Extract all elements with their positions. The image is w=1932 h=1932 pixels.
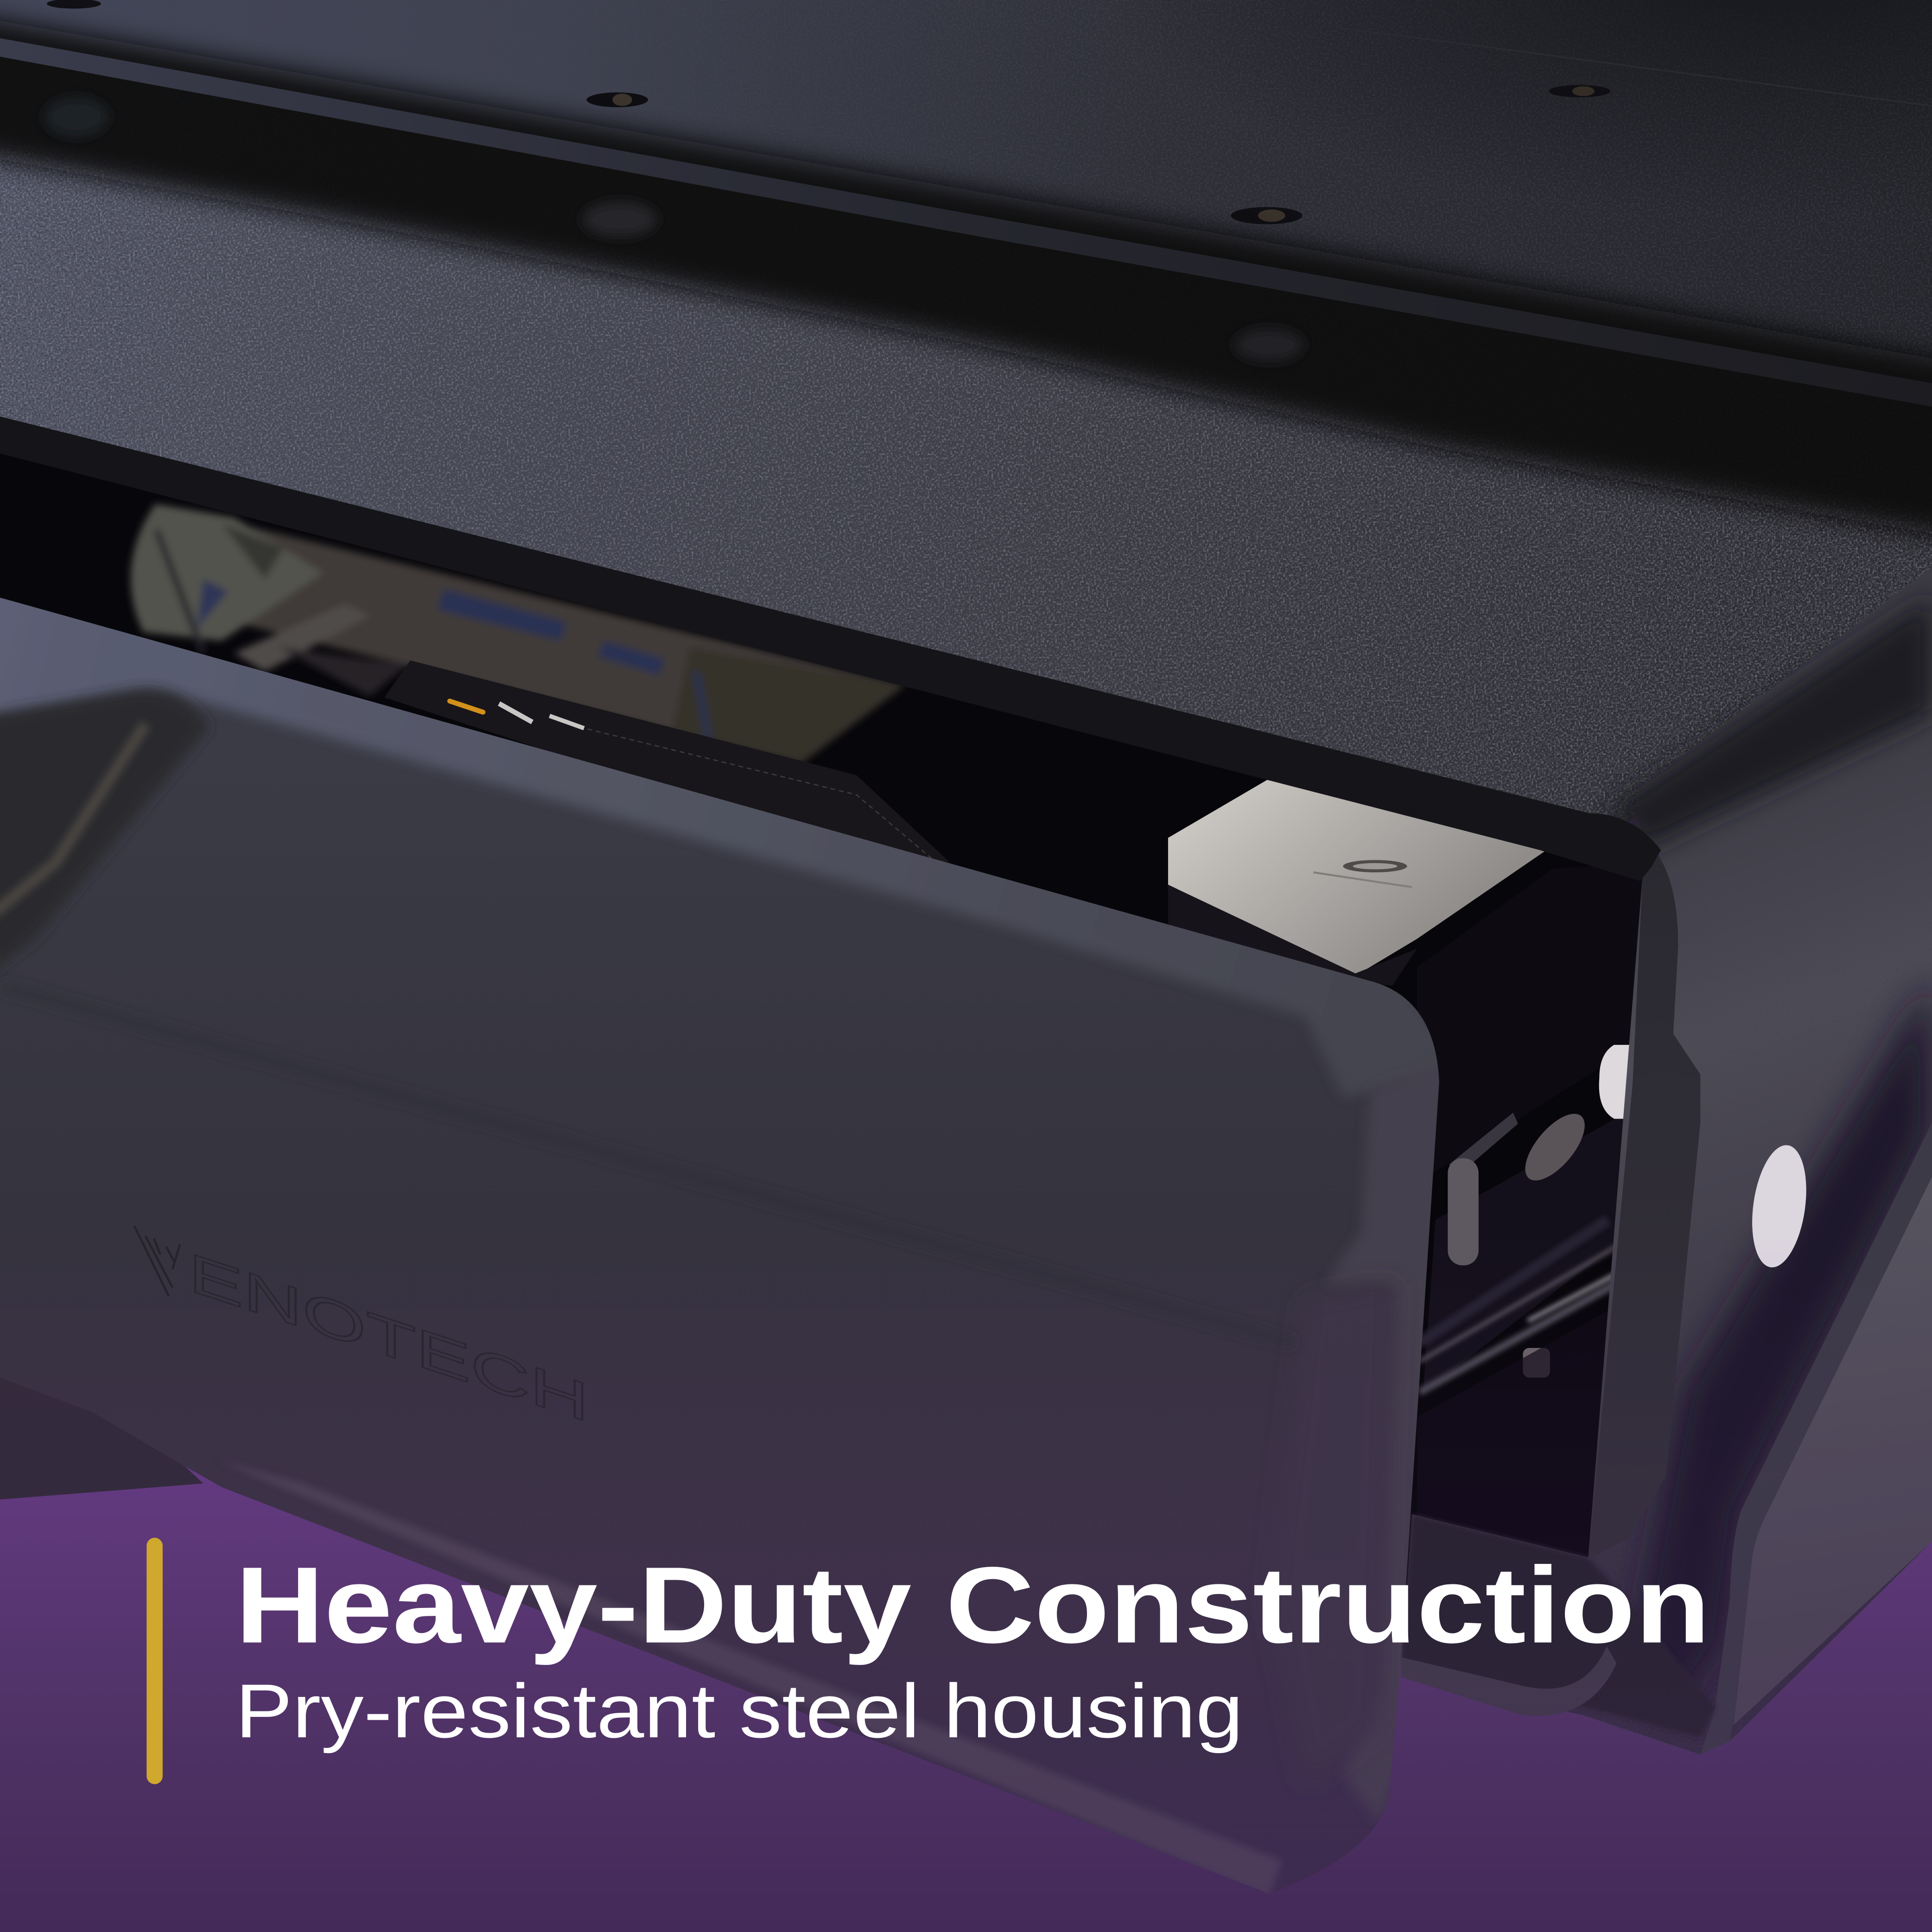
rail bracket bbox=[1417, 863, 1651, 1183]
slide rail mechanism bbox=[1417, 863, 1651, 1602]
top right dark corner shading bbox=[986, 0, 1932, 247]
embossed brand logo bbox=[134, 1226, 589, 1434]
bottom purple tint bbox=[0, 1232, 1932, 1932]
top plate mounting holes bbox=[47, 0, 1610, 224]
small pin bbox=[1523, 1348, 1550, 1378]
lower plate light speckle bbox=[0, 49, 1932, 838]
box markings bbox=[1343, 860, 1407, 872]
logo mark bbox=[134, 1226, 180, 1296]
cash bundle inside drawer bbox=[131, 504, 906, 764]
white box inside drawer bbox=[1168, 779, 1546, 986]
slot right bbox=[1515, 1104, 1595, 1190]
steel door frame bbox=[1588, 837, 1700, 1560]
lower right panel bbox=[1269, 1284, 1393, 1786]
blurred holes on lower plate bbox=[44, 97, 108, 137]
drawer interior cavity bbox=[0, 444, 1651, 1602]
lit lower face bbox=[1734, 1177, 1932, 1725]
light banknote bbox=[131, 504, 323, 641]
slot left bbox=[1448, 1158, 1479, 1265]
faint crease line bbox=[1335, 27, 1932, 106]
gold accent bar bbox=[146, 1538, 163, 1784]
plate roll-over shadow strip bbox=[1607, 597, 1932, 850]
wallet bbox=[384, 661, 950, 863]
rail streaks bbox=[1419, 1220, 1620, 1392]
wallet stitch line bbox=[579, 727, 936, 863]
right bevel bbox=[1326, 1060, 1454, 1824]
diagonal shaded band bbox=[1633, 979, 1932, 1713]
top mounting plate bbox=[0, 0, 1932, 394]
shadow under top plate bbox=[0, 13, 1932, 545]
lower plate front edge bbox=[0, 416, 1661, 881]
drawer underside at left bbox=[0, 1378, 203, 1500]
lower lit edge bbox=[217, 1460, 1281, 1898]
recess stripe bbox=[0, 724, 146, 918]
lower plate bbox=[0, 13, 1932, 838]
subheading: Pry-resistant steel housing bbox=[235, 1668, 1243, 1754]
lower slide lip bbox=[1401, 1646, 1617, 1716]
right side steel housing bbox=[1401, 567, 1932, 1762]
handle recess bbox=[0, 690, 210, 986]
front crease bbox=[0, 986, 1294, 1343]
drawer front bbox=[0, 579, 1466, 1898]
logo wordmark: ENOTECH bbox=[189, 1241, 589, 1434]
housing lip bbox=[1700, 1123, 1932, 1754]
drawer top band bbox=[0, 579, 1466, 1097]
white rivet on housing bbox=[1745, 1142, 1813, 1271]
lower dark pocket bbox=[1401, 1514, 1715, 1737]
heading: Heavy-Duty Construction bbox=[235, 1544, 1710, 1665]
lower plate grain bbox=[0, 49, 1932, 838]
body grain bbox=[1602, 591, 1932, 1762]
top plate grain bbox=[976, 0, 1932, 358]
white cylinder bbox=[1599, 1045, 1633, 1119]
top plate edge bbox=[0, 38, 1932, 407]
wallet card edges bbox=[450, 701, 483, 712]
